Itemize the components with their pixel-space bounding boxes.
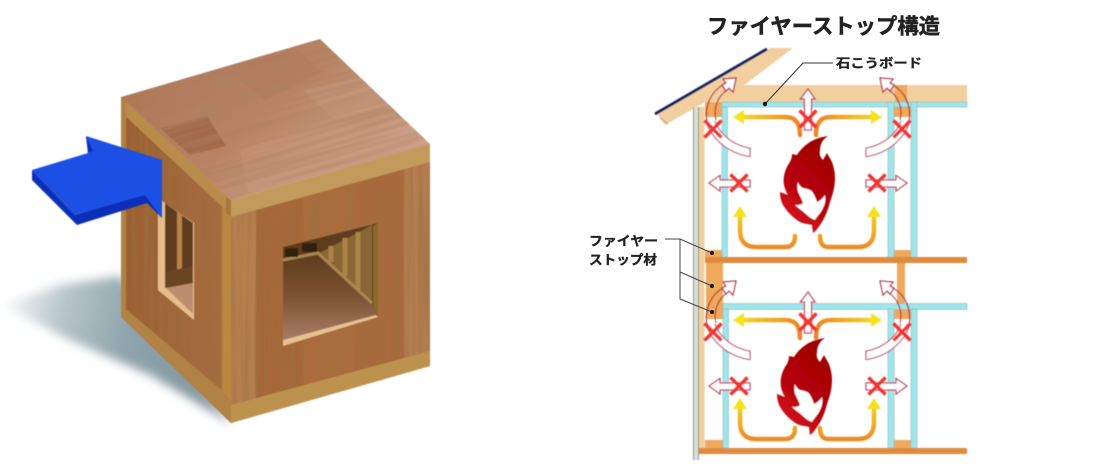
upper blocked and rising arrows xyxy=(704,78,910,192)
lower floor fire and airflow xyxy=(704,281,910,439)
lower flame icon xyxy=(777,338,832,435)
house framing xyxy=(693,85,967,460)
upper floor fire and airflow xyxy=(704,78,910,247)
title: ファイヤーストップ構造 xyxy=(707,14,940,38)
cube shadow xyxy=(2,276,232,424)
panel: fire-stop structure diagram xyxy=(589,14,967,460)
callout: fire-stop material: ストップ材 xyxy=(589,252,657,268)
cube right face xyxy=(231,150,430,423)
upper floor-level arrows xyxy=(733,206,881,247)
panel: wooden cube illustration xyxy=(10,38,431,426)
cube top face xyxy=(120,38,431,218)
upper flame icon xyxy=(780,136,835,233)
callout: fire-stop material: ファイヤー xyxy=(589,234,658,248)
roof xyxy=(655,48,793,125)
lower floor-level arrows xyxy=(733,398,881,439)
blue arrow xyxy=(32,136,162,225)
callout: gypsum board xyxy=(763,56,922,106)
callout: fire-stop material xyxy=(589,234,714,314)
right window opening xyxy=(283,223,378,346)
left window opening xyxy=(158,198,194,320)
callout: gypsum board: 石こうボード xyxy=(836,56,922,70)
lower blocked and rising arrows xyxy=(704,281,910,394)
cube left face xyxy=(121,90,231,430)
